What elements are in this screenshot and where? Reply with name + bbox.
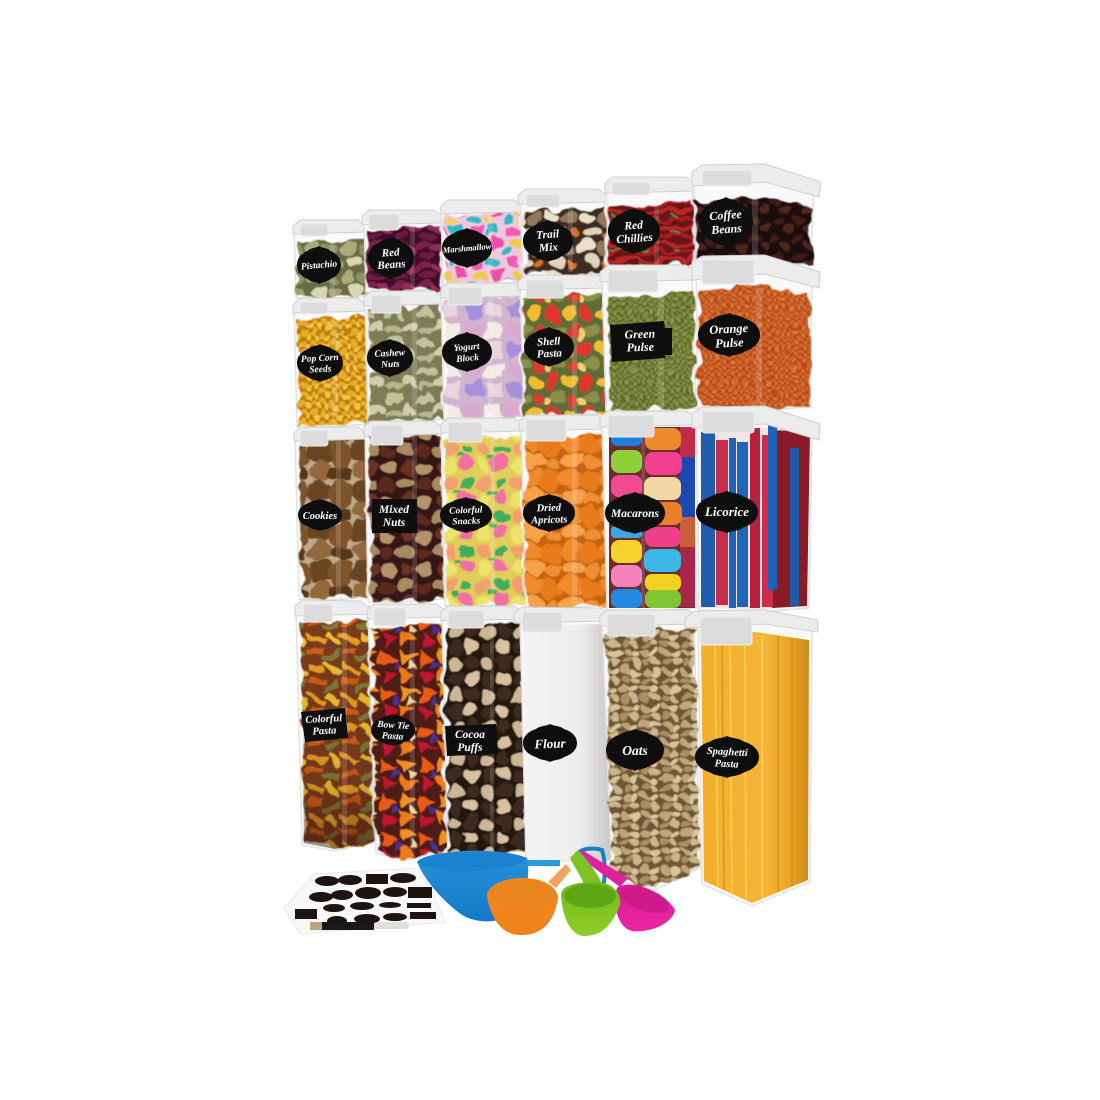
label: Cashew Nuts: Nuts (380, 359, 400, 371)
label: Red Beans (368, 237, 414, 279)
label: Cookies (298, 499, 342, 531)
label: Red Beans: Beans (376, 258, 406, 272)
container: coffee beans (692, 164, 821, 266)
accessory: chalkboard label sheets and marker (284, 868, 446, 934)
label: Trail Mix: Mix (538, 241, 559, 255)
pink cup (578, 850, 675, 931)
container: red chillies (605, 177, 695, 268)
label: Trail Mix: Trail (536, 228, 560, 242)
label: Red Chillies (608, 208, 660, 254)
label: Red Chillies: Chillies (616, 232, 654, 246)
label: Pop Corn Seeds (297, 344, 343, 382)
container: flour (514, 607, 612, 862)
container: oats (600, 610, 700, 890)
container: green pulse (600, 265, 696, 411)
label: Spaghetti Pasta: Spaghetti (707, 746, 748, 759)
row 3 containers (294, 406, 820, 612)
label: Pop Corn Seeds: Pop Corn (301, 353, 339, 365)
container: pistachio (293, 220, 368, 299)
label: Red Chillies: Red (624, 219, 643, 233)
label: Dried Apricots: Apricots (530, 514, 568, 527)
label: Cookies: Cookies (303, 511, 337, 522)
label: Yogurt Block: Block (455, 353, 480, 365)
container: bow tie pasta (367, 604, 447, 860)
label: Bow Tie Pasta: Bow Tie (377, 720, 410, 732)
marker pen (310, 922, 409, 930)
label: Macarons (605, 492, 665, 534)
container: macarons (600, 411, 697, 611)
container: colorful snacks (440, 418, 525, 606)
label: Cocoa Puffs (445, 724, 498, 756)
label: Spaghetti Pasta (695, 736, 759, 778)
label: Colorful Pasta: Pasta (312, 725, 337, 738)
label: Colorful Snacks: Snacks (452, 517, 481, 527)
container: cookies (294, 427, 370, 600)
label: Bow Tie Pasta: Pasta (381, 731, 404, 743)
label: Oats (606, 729, 664, 771)
label: Yogurt Block: Yogurt (453, 342, 480, 354)
label sheet (284, 868, 446, 934)
label: Coffee Beans: Beans (710, 221, 743, 237)
label: Pop Corn Seeds: Seeds (309, 364, 332, 376)
label: Trail Mix (523, 220, 573, 262)
label: Dried Apricots (523, 494, 575, 532)
label: Bow Tie Pasta (371, 714, 415, 746)
label: Cashew Nuts: Cashew (374, 348, 405, 360)
label: Shell Pasta: Pasta (537, 347, 563, 361)
label: Macarons: Macarons (610, 508, 659, 520)
row 2 containers (293, 255, 820, 427)
label: Colorful Snacks (440, 497, 492, 533)
label: Green Pulse: Green (624, 326, 655, 342)
container: orange pulse (692, 255, 820, 411)
container: yogurt block (441, 283, 523, 420)
label: Shell Pasta: Shell (537, 335, 561, 349)
row 4 containers (295, 600, 818, 906)
label: Green Pulse (610, 321, 672, 362)
container: licorice (692, 406, 820, 612)
container: dried apricots (519, 415, 608, 608)
container: colorful pasta (295, 600, 374, 851)
label: Orange Pulse (698, 313, 760, 357)
label: Mixed Nuts (372, 499, 417, 533)
container: popcorn seeds (293, 298, 369, 427)
blue ring handle (575, 848, 605, 886)
blue scoop (417, 851, 560, 921)
container: marshmallow (441, 200, 523, 285)
label: Red Beans: Red (381, 246, 400, 260)
label: Licorice (696, 491, 758, 533)
green cup (561, 850, 620, 936)
label: Pistachio: Pistachio (301, 259, 338, 273)
accessory: measuring scoops (417, 848, 675, 936)
label: Cashew Nuts (367, 339, 413, 377)
label: Yogurt Block (442, 332, 492, 372)
label: Oats: Oats (622, 743, 648, 758)
label: Orange Pulse: Pulse (715, 335, 744, 351)
label: Flour (523, 724, 577, 762)
label: Licorice: Licorice (704, 504, 749, 519)
label: Green Pulse: Pulse (626, 339, 655, 354)
label: Mixed Nuts: Nuts (382, 517, 406, 529)
label: Coffee Beans (699, 197, 753, 247)
label: Marshmallow: Marshmallow (441, 241, 492, 255)
container: red beans (362, 210, 442, 292)
label: Orange Pulse: Orange (709, 321, 748, 337)
label: Colorful Snacks: Colorful (449, 505, 483, 517)
container: spaghetti pasta (685, 610, 818, 906)
label: Colorful Pasta: Colorful (305, 713, 342, 726)
label: Shell Pasta (524, 327, 574, 367)
container: shell pasta (518, 275, 608, 417)
label: Cocoa Puffs: Cocoa (455, 729, 485, 741)
container: mixed nuts (364, 421, 444, 602)
container: cashew nuts (364, 291, 444, 423)
label: Flour: Flour (533, 735, 567, 752)
container: trail mix (518, 189, 607, 277)
label: Dried Apricots: Dried (536, 503, 561, 514)
label: Spaghetti Pasta: Pasta (714, 758, 739, 771)
row 1 containers (293, 164, 821, 299)
orange cup (487, 864, 571, 935)
label: Cocoa Puffs: Puffs (457, 742, 483, 754)
label shapes (295, 873, 436, 926)
container: cocoa puffs (441, 606, 528, 858)
label: Mixed Nuts: Mixed (379, 504, 409, 516)
label: Colorful Pasta (301, 708, 348, 742)
label: Coffee Beans: Coffee (709, 207, 742, 223)
